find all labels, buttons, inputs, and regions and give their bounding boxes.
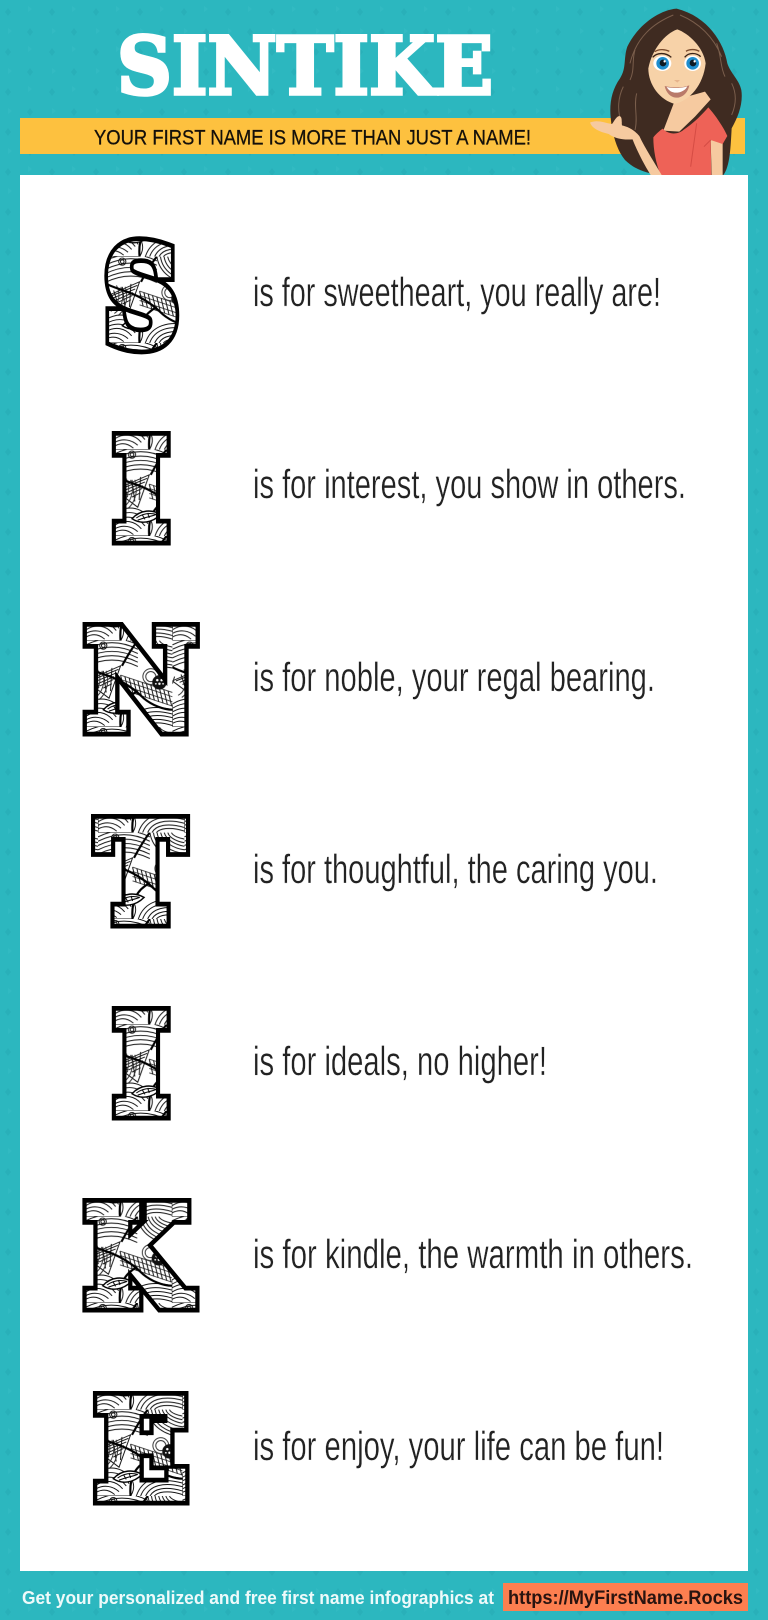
row: N [86, 604, 655, 758]
row: I [115, 413, 686, 567]
zentangle letter T: T [98, 796, 183, 950]
row: K [85, 1180, 693, 1334]
zentangle letter I: I [115, 988, 168, 1142]
near arm and hand [590, 116, 662, 175]
zentangle letter E: E [96, 1373, 187, 1527]
zentangle letter E: E [96, 1373, 187, 1527]
zentangle letter I: I [115, 413, 168, 567]
row: T [98, 796, 658, 950]
zentangle letter T: T [98, 796, 183, 950]
row: E [96, 1373, 664, 1527]
face [648, 29, 706, 104]
tagline banner: YOUR FIRST NAME IS MORE THAN JUST A NAME! [94, 126, 531, 150]
mouth [665, 85, 689, 98]
title: SINTIKE [117, 19, 493, 113]
footer url badge: https://MyFirstName.Rocks [508, 1588, 743, 1609]
eyes [653, 50, 701, 71]
zentangle letter I: I [115, 413, 168, 567]
zentangle letter K: K [85, 1180, 191, 1334]
footer call to action: Get your personalized and free first name infographics at [22, 1588, 494, 1608]
zentangle letter K: K [85, 1180, 191, 1334]
illustration: woman presenting [590, 9, 742, 175]
zentangle letter N: N [86, 604, 196, 758]
zentangle letter I: I [115, 988, 168, 1142]
row: S [105, 220, 661, 374]
neck and far arm [663, 92, 723, 175]
row: I second [115, 988, 547, 1142]
zentangle letter N: N [86, 604, 196, 758]
zentangle letter S: S [105, 220, 178, 374]
shirt [653, 107, 727, 175]
zentangle letter S: S [105, 220, 178, 374]
tagline banner [20, 118, 745, 154]
sentence for second I: is for ideals, no higher! [253, 1038, 547, 1084]
